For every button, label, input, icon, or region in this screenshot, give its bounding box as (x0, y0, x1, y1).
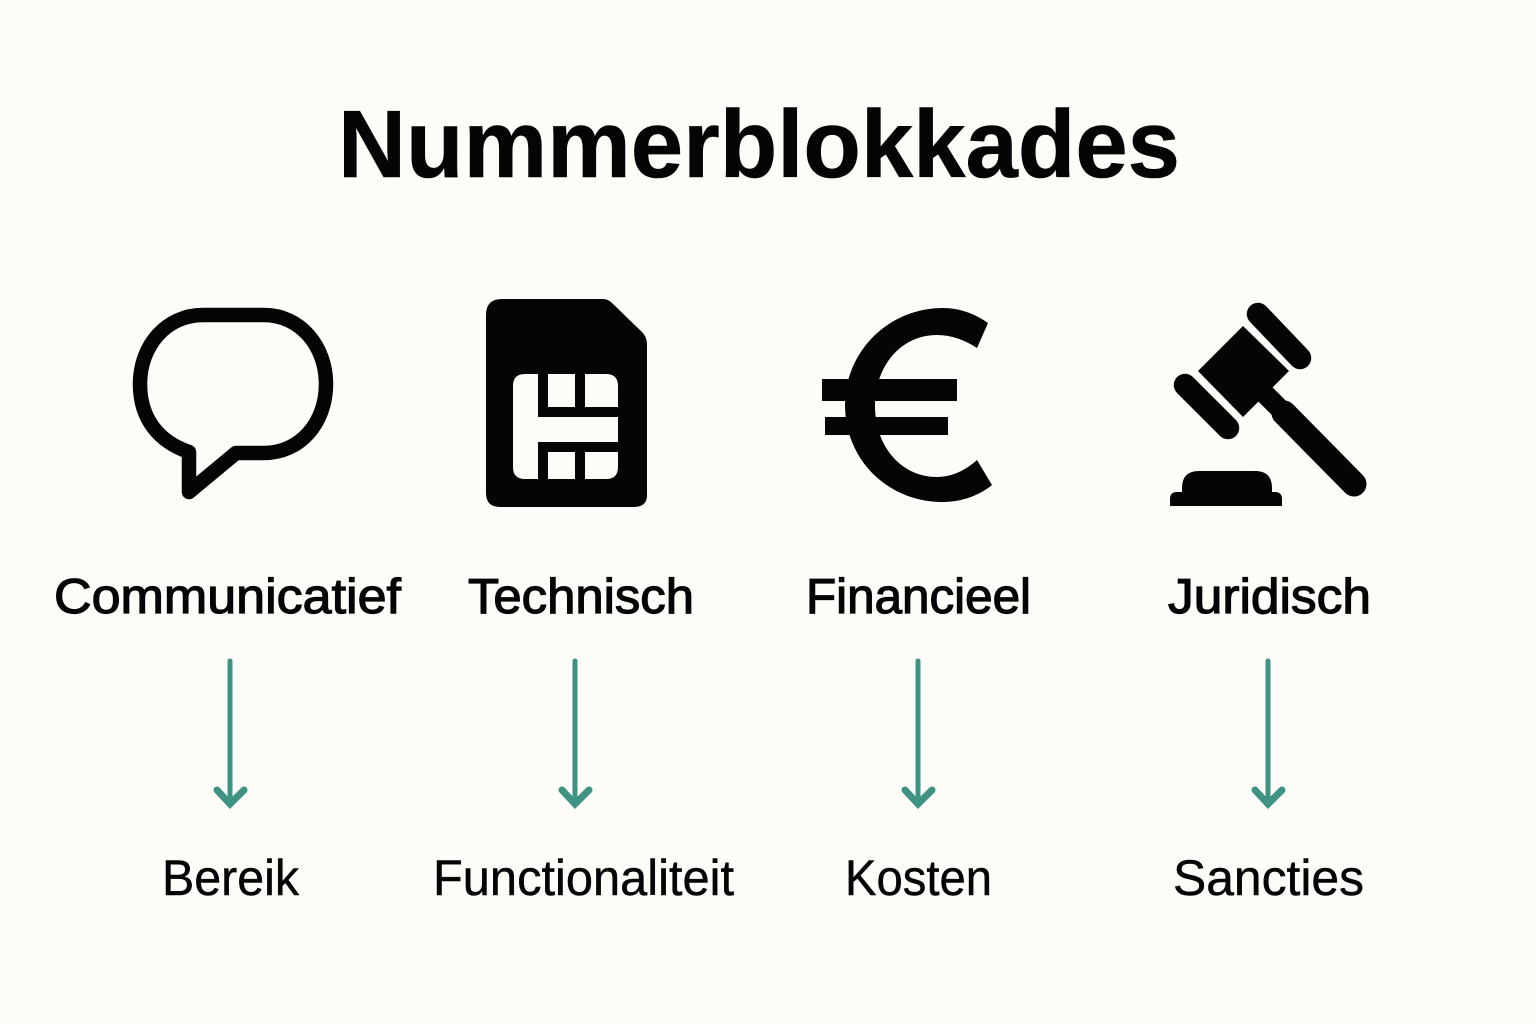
label: kosten: Kosten (845, 850, 992, 906)
heading: technisch: Technisch (468, 570, 694, 624)
heading: financieel: Financieel (806, 570, 1031, 624)
icon: sim card (486, 299, 647, 507)
icon: speech bubble (140, 315, 326, 492)
arrow: technisch to functionaliteit (562, 661, 589, 804)
panel: financieel (806, 308, 1031, 906)
arrow: juridisch to sancties (1255, 661, 1282, 804)
panel: juridisch (1168, 314, 1371, 906)
arrow: financieel to kosten (905, 661, 932, 804)
panel: technisch (433, 299, 734, 906)
heading: communicatief: Communicatief (54, 570, 401, 624)
label: functionaliteit: Functionaliteit (433, 850, 734, 906)
label: bereik: Bereik (162, 850, 300, 906)
icon: euro sign (822, 308, 992, 502)
title: Nummerblokkades (338, 91, 1180, 198)
icon: gavel (1170, 314, 1354, 506)
arrow: communicatief to bereik (217, 661, 244, 804)
label: sancties: Sancties (1173, 850, 1364, 906)
heading: juridisch: Juridisch (1168, 570, 1371, 624)
panel: communicatief (54, 315, 401, 906)
